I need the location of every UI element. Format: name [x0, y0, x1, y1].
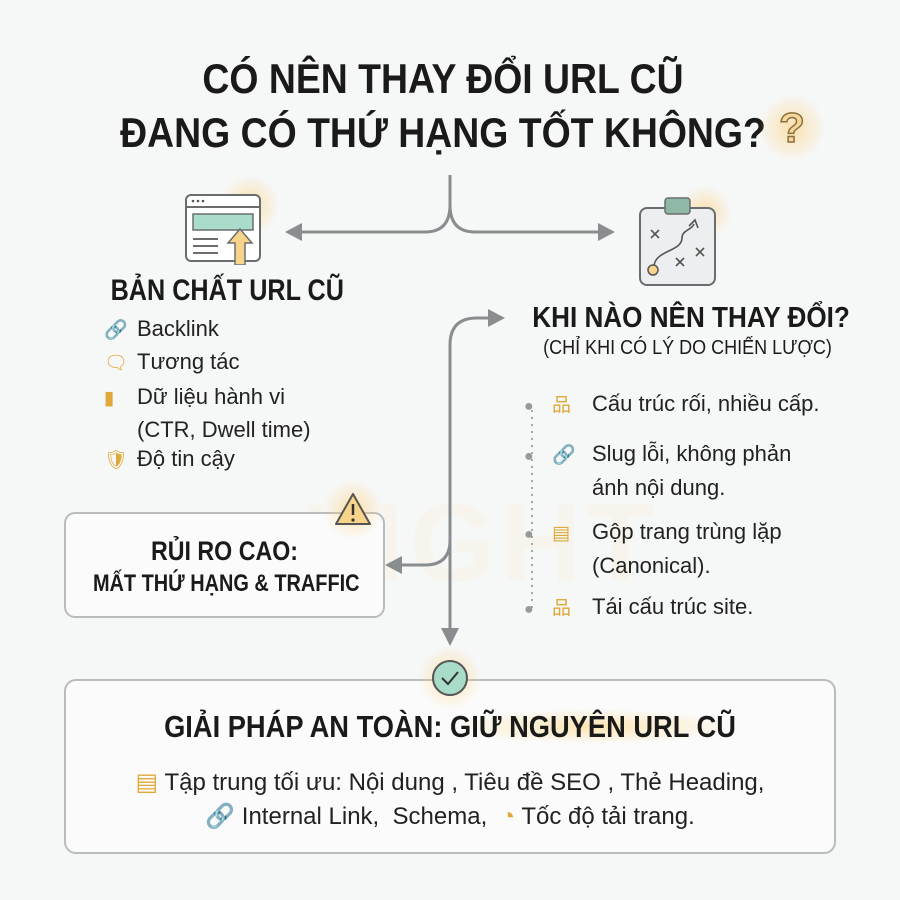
item: backlink: Backlink: [137, 316, 219, 341]
item 2: ánh nội dung.: [592, 475, 725, 500]
item: do tin cay: 🛡: [104, 450, 128, 471]
item 2: ●: [524, 448, 534, 465]
icon: check circle: [422, 650, 478, 706]
title: [120, 55, 766, 156]
item: du lieu: (CTR, Dwell time): [137, 417, 311, 442]
item 3: [524, 519, 782, 578]
panel: solution: [64, 679, 836, 854]
item 4: 品: [552, 598, 571, 619]
heading: Bản chất URL cũ: BẢN CHẤT URL CŨ: [111, 274, 344, 307]
item 2: [524, 441, 791, 500]
panel: risk: MẤT THỨ HẠNG & TRAFFIC: [93, 570, 360, 597]
icon: question mark: ?: [779, 104, 805, 151]
item: du lieu: [104, 384, 311, 442]
icon: question mark: [760, 98, 822, 158]
item 1: Cấu trúc rối, nhiều cấp.: [592, 391, 819, 416]
panel: risk: [64, 512, 385, 618]
item 4: Tái cấu trúc site.: [592, 594, 753, 619]
item 1: ●: [524, 398, 534, 415]
list: reasons: [524, 391, 819, 619]
item 2: 🔗: [552, 445, 576, 466]
heading: solution: GIẢI PHÁP AN TOÀN: GIỮ NGUYÊN URL CŨ: [164, 709, 736, 744]
item: backlink: 🔗: [104, 320, 128, 341]
item: du lieu: ▮: [104, 388, 114, 409]
icon: browser with upload arrow: [185, 178, 276, 265]
icon: clipboard strategy: [639, 188, 728, 286]
item 3: ●: [524, 526, 534, 543]
heading: Khi nào nên thay đổi: [532, 301, 850, 359]
title: ĐANG CÓ THỨ HẠNG TỐT KHÔNG?: [120, 109, 766, 156]
item 3: Gộp trang trùng lặp: [592, 519, 782, 544]
panel: risk: RỦI RO CAO:: [151, 536, 298, 566]
text: solution details: [136, 769, 764, 830]
list: bản chất: [104, 316, 311, 471]
item: du lieu: Dữ liệu hành vi: [137, 384, 285, 409]
item 3: (Canonical).: [592, 553, 711, 578]
text: solution details: ▤ Tập trung tối ưu: Nội dung , Tiêu đề SEO , Thẻ Heading,: [136, 769, 764, 796]
item 3: ▤: [552, 523, 570, 544]
item: tuong tac: 🗨: [104, 353, 128, 374]
heading: Khi nào nên thay đổi: (CHỈ KHI CÓ LÝ DO CHIẾN LƯỢC): [543, 337, 832, 359]
item: tuong tac: Tương tác: [137, 349, 240, 374]
text: solution details: 🔗 Internal Link, Schema, ◔ Tốc độ tải trang.: [205, 803, 695, 830]
item 2: Slug lỗi, không phản: [592, 441, 791, 466]
icon: warning: [326, 484, 380, 536]
item 1: 品: [552, 395, 571, 416]
heading: Khi nào nên thay đổi: KHI NÀO NÊN THAY ĐỔI?: [532, 302, 850, 334]
item 4: ●: [524, 601, 534, 618]
watermark: LIGHT: [300, 482, 660, 605]
item: do tin cay: Độ tin cậy: [137, 446, 235, 471]
title: CÓ NÊN THAY ĐỔI URL CŨ: [202, 55, 684, 102]
